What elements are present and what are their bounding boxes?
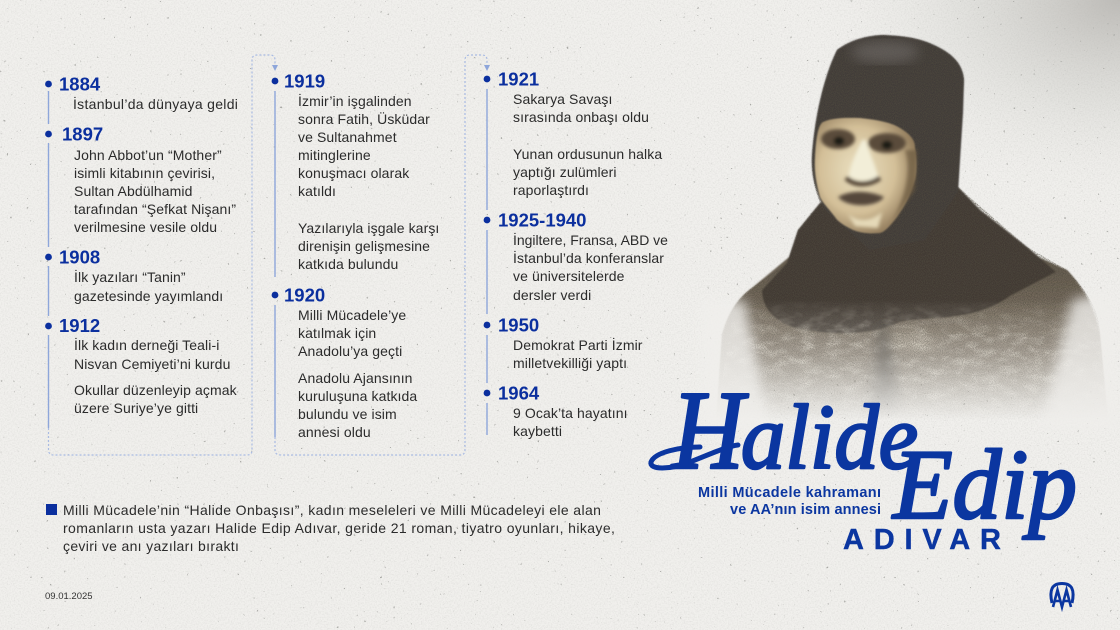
entry 1897: isimli kitabının çevirisi, (74, 165, 215, 181)
entry 1897: John Abbot’un “Mother” (74, 147, 222, 163)
entry 1912: Okullar düzenleyip açmak (74, 382, 238, 398)
entry 1950: milletvekilliği yaptı (513, 355, 627, 371)
dashed connector: column 2 to 3 (275, 55, 490, 455)
entry 1897 (45, 124, 236, 235)
dashed connector: column 1 to 2 (48, 55, 278, 455)
entry 1964 (484, 382, 628, 439)
coat shadows (868, 326, 938, 411)
entry 1925-1940: ve üniversitelerde (513, 268, 625, 284)
entry 1920 (272, 284, 417, 440)
date: 09.01.2025 (45, 591, 93, 602)
entry 1921: Yunan ordusunun halka (513, 146, 662, 162)
title: Halide H: H (670, 369, 749, 493)
entry 1897: tarafından “Şefkat Nişanı” (74, 201, 236, 217)
column 2 line (274, 91, 276, 437)
entry 1897: Sultan Abdülhamid (74, 183, 192, 199)
entry 1897: verilmesine vesile oldu (74, 219, 217, 235)
entry 1908: gazetesinde yayımlandı (74, 288, 223, 304)
portrait photograph (716, 35, 1108, 420)
entry 1950: 1950 (498, 314, 539, 336)
entry 1919: direnişin gelişmesine (298, 238, 430, 254)
hood highlight (851, 41, 919, 63)
entry 1921: raporlaştırdı (513, 182, 589, 198)
entry 1920: kuruluşuna katkıda (298, 388, 417, 404)
entry 1908: İlk yazıları “Tanin” (74, 268, 186, 285)
entry 1919 (272, 70, 439, 272)
entry 1920: Anadolu’ya geçti (298, 343, 402, 359)
entry 1912: 1912 (59, 315, 100, 336)
timeline column 1 (45, 74, 238, 428)
entry 1919: ve Sultanahmet (298, 129, 397, 145)
entry 1912: Nisvan Cemiyeti’ni kurdu (74, 356, 230, 372)
summary note (46, 502, 615, 554)
entry 1908 (45, 246, 223, 304)
entry 1921 (484, 68, 662, 198)
entry 1921: yaptığı zulümleri (513, 164, 617, 180)
photo grain (716, 35, 1108, 420)
entry 1884 (45, 74, 238, 112)
entry 1919: konuşmacı olarak (298, 165, 410, 181)
note line 2: romanların usta yazarı Halide Edip Adıvar, geride 21 roman, tiyatro oyunları, hikaye, (63, 520, 615, 536)
entry 1925-1940 (484, 210, 668, 303)
note line 3: çeviri ve anı yazıları bıraktı (63, 538, 239, 554)
entry 1920: Milli Mücadele’ye (298, 307, 406, 323)
title: Adıvar: ADIVAR (843, 524, 1001, 556)
entry 1919: mitinglerine (298, 147, 371, 163)
entry 1920: 1920 (284, 284, 325, 306)
entry 1884: İstanbul’da dünyaya geldi (73, 95, 238, 112)
scarf (762, 187, 1056, 333)
note line 1: Milli Mücadele’nin “Halide Onbaşısı”, kadın meseleleri ve Milli Mücadeleyi ele alan (63, 502, 601, 518)
entry 1919: katkıda bulundu (298, 256, 398, 272)
entry 1925-1940: dersler verdi (513, 287, 591, 303)
entry 1919: Yazılarıyla işgale karşı (298, 220, 439, 236)
entry 1912: üzere Suriye’ye gitti (74, 400, 198, 416)
timeline column 3 (484, 68, 668, 439)
title (651, 369, 1077, 556)
entry 1920: Anadolu Ajansının (298, 370, 413, 386)
entry 1897: 1897 (62, 124, 103, 144)
column 1 line (48, 91, 50, 428)
entry 1921: 1921 (498, 68, 539, 90)
photo edge fade (700, 290, 1120, 430)
column 3 line (486, 89, 488, 435)
entry 1925-1940: İngiltere, Fransa, ABD ve (513, 231, 668, 248)
entry 1919: 1919 (284, 70, 325, 92)
entry 1964: 9 Ocak’ta hayatını (513, 405, 628, 421)
subtitle line 2: ve AA’nın isim annesi (730, 502, 881, 518)
coat (720, 256, 1103, 412)
timeline column 2 (272, 70, 439, 440)
coat mottling (730, 306, 1070, 400)
entry 1964: kaybetti (513, 423, 562, 439)
entry 1919: İzmir’in işgalinden (298, 92, 412, 109)
note square bullet (46, 504, 57, 515)
entry 1912: İlk kadın derneği Teali-i (74, 336, 219, 353)
hood (810, 34, 966, 204)
entry 1921: Sakarya Savaşı (513, 91, 612, 107)
title swash: Halide (651, 445, 738, 468)
entry 1919: katıldı (298, 183, 336, 199)
icon: AA logo (1051, 584, 1073, 607)
entry 1925-1940: 1925-1940 (498, 210, 586, 230)
entry 1919: sonra Fatih, Üsküdar (298, 110, 430, 127)
entry 1920: bulundu ve isim (298, 406, 397, 422)
entry 1950: Demokrat Parti İzmir (513, 336, 643, 353)
entry 1884: 1884 (59, 74, 101, 94)
entry 1908: 1908 (59, 246, 100, 268)
entry 1912 (45, 315, 238, 416)
title: Edip: Edip (891, 429, 1077, 540)
subtitle line 1: Milli Mücadele kahramanı (698, 485, 881, 501)
title: Halide rest: alide (741, 386, 918, 488)
entry 1950 (484, 314, 643, 371)
entry 1964: 1964 (498, 382, 540, 404)
face (815, 118, 916, 233)
entry 1925-1940: İstanbul’da konferanslar (513, 249, 664, 266)
entry 1921: sırasında onbaşı oldu (513, 109, 649, 125)
entry 1920: katılmak için (298, 325, 376, 341)
entry 1920: annesi oldu (298, 424, 371, 440)
facial features (821, 129, 917, 228)
